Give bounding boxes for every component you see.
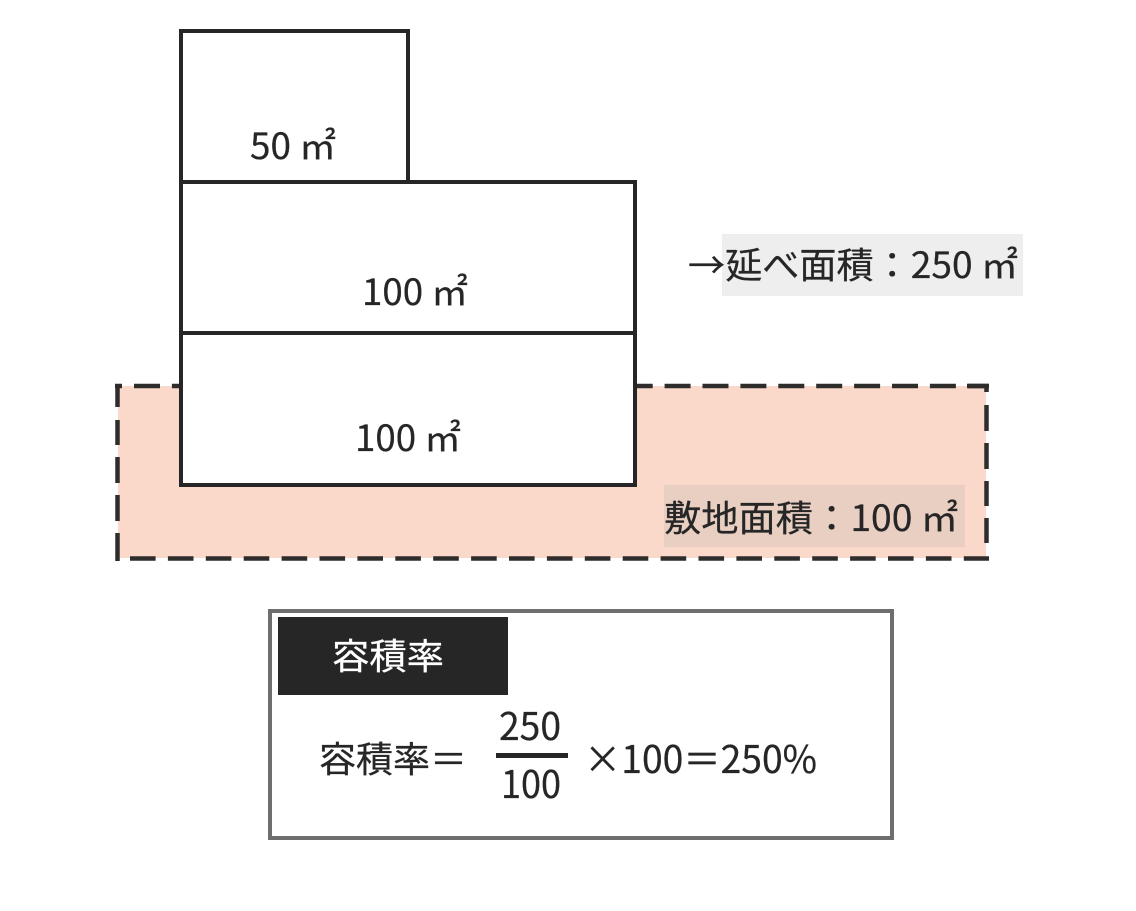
label: third floor area: 50 ㎡: [250, 118, 336, 170]
formula result: ×100＝250%: [584, 729, 817, 784]
fraction: [496, 696, 568, 809]
building: first floor: [181, 333, 635, 485]
building: third floor: [181, 31, 408, 182]
site area with dashed boundary: [115, 384, 989, 561]
formula label: 容積率＝: [319, 731, 467, 783]
panel: floor area ratio: [270, 611, 892, 838]
label: second floor area: 100 ㎡: [362, 264, 468, 316]
heading: floor area ratio: [278, 617, 508, 695]
callout: total floor area: →延べ面積：250 ㎡: [688, 237, 1018, 289]
callout: site area: 敷地面積：100 ㎡: [664, 490, 958, 542]
fraction: 250: [499, 696, 561, 751]
fraction: 100: [501, 754, 561, 809]
heading: floor area ratio: 容積率: [332, 628, 444, 680]
label: first floor area: 100 ㎡: [355, 410, 461, 462]
building: second floor: [181, 182, 635, 333]
